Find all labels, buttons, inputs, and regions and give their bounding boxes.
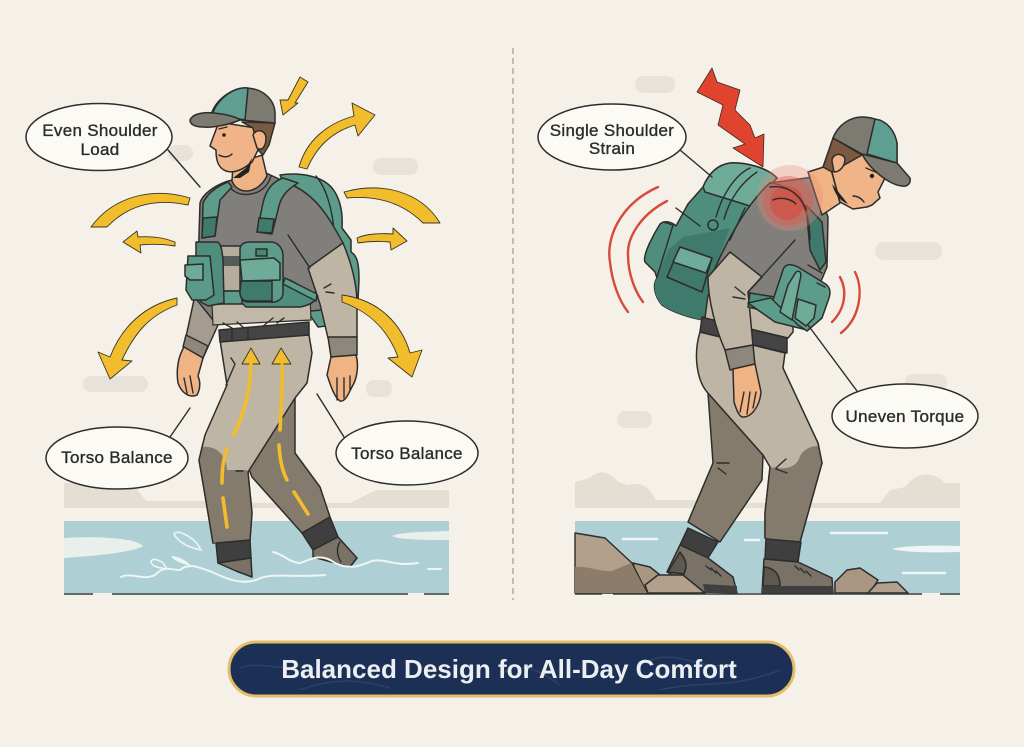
water splash left xyxy=(121,532,418,582)
right arm xyxy=(308,243,357,338)
arrow: mid right xyxy=(357,228,407,250)
backpack right figure xyxy=(645,163,777,320)
distant shore left xyxy=(64,483,449,508)
waist band xyxy=(212,295,311,325)
background clouds xyxy=(83,76,947,428)
callout: torso balance left xyxy=(46,427,188,489)
hand right xyxy=(733,364,761,417)
ground line left xyxy=(64,593,449,595)
arrow: upper right arc xyxy=(344,188,440,223)
center straps xyxy=(221,246,242,291)
right chest pouch xyxy=(240,242,283,302)
leg force lines xyxy=(222,348,308,527)
callout: uneven torque: Uneven Torque xyxy=(846,407,964,426)
neck xyxy=(232,155,267,191)
arrow: lower right xyxy=(342,295,422,377)
front boot xyxy=(218,558,252,577)
red vibration arcs xyxy=(609,187,860,333)
figure: strained hiker xyxy=(645,117,910,593)
callout: even shoulder load xyxy=(26,104,172,170)
left arm xyxy=(184,290,222,358)
rock in front of rear boot xyxy=(645,575,705,593)
ear xyxy=(253,131,266,149)
back boot xyxy=(313,537,357,567)
ear right xyxy=(832,154,845,172)
torso shirt right xyxy=(710,177,828,312)
rocks behind hiker xyxy=(575,533,908,593)
right hand xyxy=(327,355,357,401)
arm right figure xyxy=(708,252,762,350)
ground line right xyxy=(575,593,960,595)
title banner: Balanced Design for All-Day Comfort xyxy=(281,654,737,684)
front cuff xyxy=(216,540,251,563)
callout: single shoulder strain: Single Shoulder xyxy=(550,121,674,140)
callout: torso balance left: Torso Balance xyxy=(61,448,173,467)
lower rig panel xyxy=(242,280,318,307)
arrow: upper left arc xyxy=(91,193,190,227)
left chest pouch xyxy=(185,242,224,306)
chest pouch right xyxy=(773,265,830,331)
panel: balanced scene xyxy=(64,483,449,594)
hair right xyxy=(823,138,862,172)
lightning bolt xyxy=(697,68,764,167)
water left xyxy=(64,521,449,593)
vest panel right xyxy=(748,293,775,313)
water right xyxy=(575,521,960,593)
hip strap xyxy=(283,278,317,301)
arrow: lower left xyxy=(98,298,177,379)
sleeve cuff right xyxy=(725,345,755,370)
vest strap right xyxy=(806,205,826,270)
left hand xyxy=(177,347,203,396)
figure: balanced hiker xyxy=(177,88,359,577)
callout: uneven torque xyxy=(832,384,978,448)
balance arrows xyxy=(91,77,440,379)
callout: even shoulder load: Even Shoulder xyxy=(42,121,158,140)
back leg cuff xyxy=(302,517,338,550)
backpack xyxy=(280,174,359,327)
arrow: upper right large xyxy=(299,103,375,169)
cap xyxy=(190,88,275,127)
rear leg xyxy=(688,393,763,542)
face right xyxy=(830,154,885,209)
torso shirt xyxy=(197,173,343,320)
callout: torso balance right xyxy=(336,421,478,485)
frown right xyxy=(832,168,880,204)
front leg xyxy=(696,332,822,542)
face xyxy=(210,122,268,172)
callout: single shoulder strain xyxy=(538,104,686,170)
cap right xyxy=(833,117,910,186)
water highlights left xyxy=(64,531,449,569)
arrow: mid left xyxy=(123,231,175,253)
arrow: top small xyxy=(280,77,308,115)
front shin shade xyxy=(199,447,252,543)
pain glow xyxy=(757,165,823,231)
front cuff xyxy=(765,539,801,562)
belt xyxy=(219,322,309,342)
panel: unbalanced scene xyxy=(575,472,960,594)
front boot xyxy=(762,559,833,593)
eye and smile xyxy=(219,127,232,157)
waist right xyxy=(705,295,793,338)
front leg and hips xyxy=(199,335,312,543)
callout: torso balance right: Torso Balance xyxy=(351,444,463,463)
belt right xyxy=(700,317,787,353)
neck right xyxy=(808,165,840,215)
rear cuff xyxy=(680,528,718,558)
right shoulder strap xyxy=(257,178,298,234)
water highlights right xyxy=(623,533,960,573)
beard shadow xyxy=(233,158,252,178)
leader lines xyxy=(168,150,857,437)
left shoulder strap xyxy=(202,182,232,238)
divider xyxy=(512,48,514,600)
distant hills right xyxy=(575,472,960,508)
back leg xyxy=(248,398,330,533)
title banner xyxy=(229,642,794,696)
callout: even shoulder load: Load xyxy=(80,140,120,159)
hair xyxy=(242,122,275,155)
rear boot xyxy=(667,545,737,593)
callout: single shoulder strain: Strain xyxy=(589,139,635,158)
front shin shade xyxy=(765,446,822,542)
